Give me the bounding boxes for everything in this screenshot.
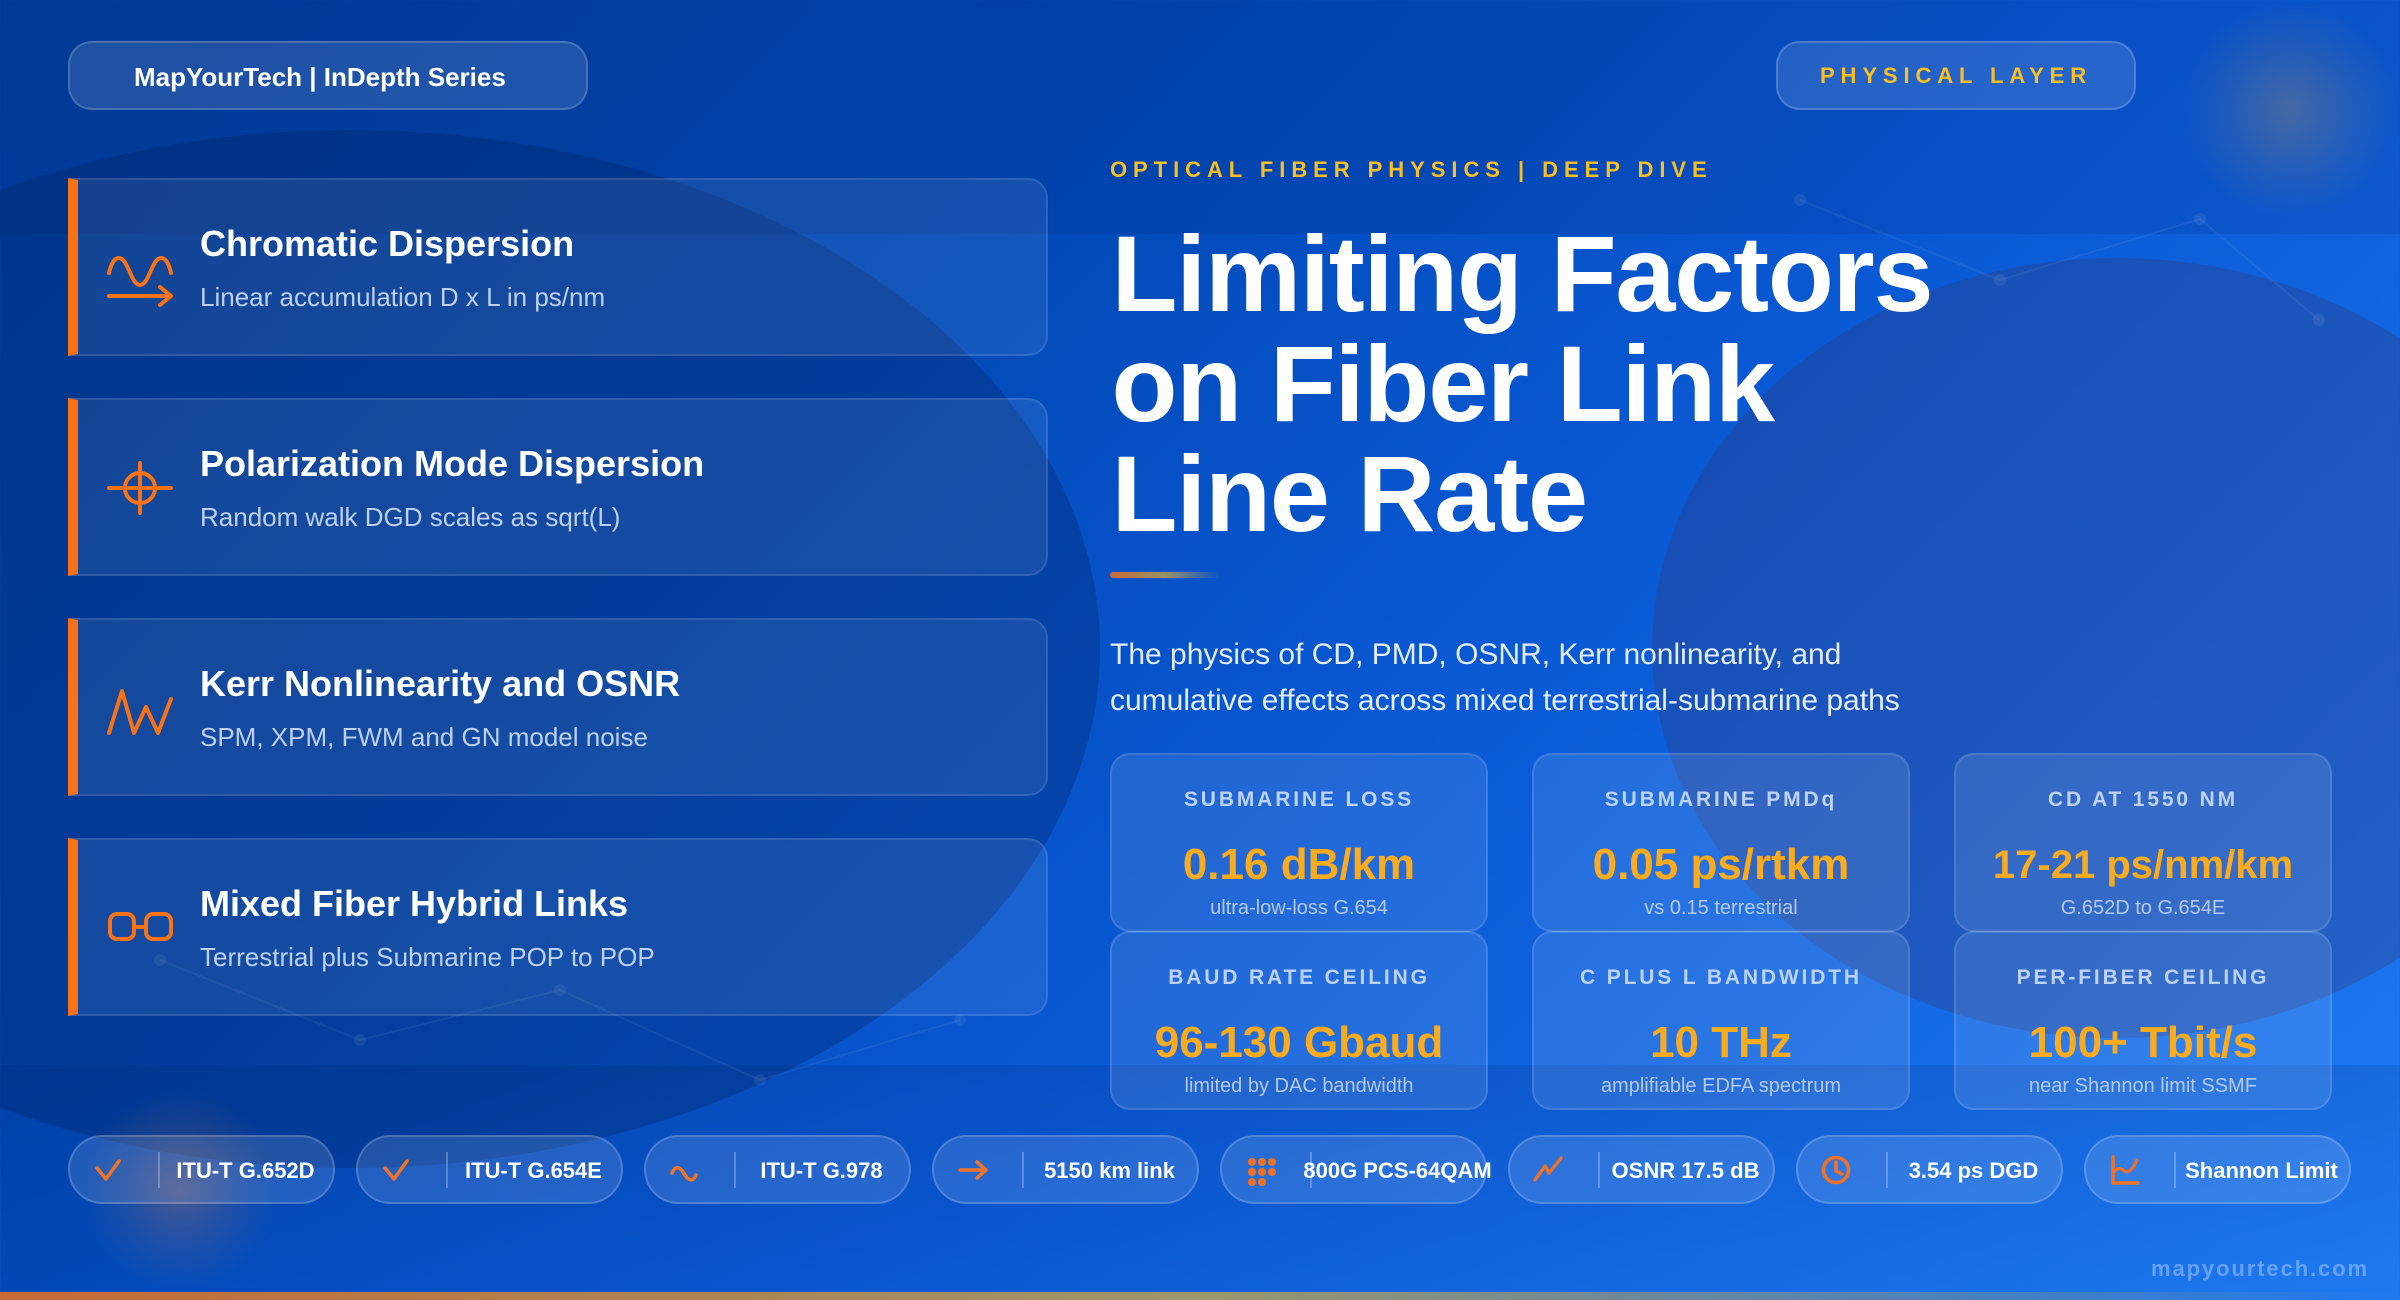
title: on Fiber Link [1112,323,1774,444]
tag: 3.54 ps DGD: 3.54 ps DGD [1909,1158,2038,1183]
stat: baud rate ceiling [1110,931,1488,1110]
icon: wave [670,1166,698,1182]
heading: mixed fiber hybrid links: Mixed Fiber Hybrid Links [200,883,628,924]
badge: physical layer [1776,41,2136,110]
tag: 800G PCS-64QAM: 800G PCS-64QAM [1303,1158,1492,1183]
icon: signal spark [1533,1156,1563,1182]
stat: C plus L bandwidth: C PLUS L BANDWIDTH [1580,966,1862,989]
eyebrow: OPTICAL FIBER PHYSICS | DEEP DIVE [1110,157,1713,182]
stat: baud rate ceiling: BAUD RATE CEILING [1168,966,1430,989]
stat: C plus L bandwidth [1532,931,1910,1110]
panel: polarization mode dispersion [68,398,1048,576]
heading: kerr nonlinearity: Kerr Nonlinearity and OSNR [200,663,680,704]
icon: check [383,1159,409,1181]
tag: 800G PCS-64QAM [1220,1135,1487,1204]
icon: check [95,1159,121,1181]
title: Limiting Factors [1112,213,1932,334]
heading: chromatic dispersion: Chromatic Dispersion [200,223,574,264]
bottom gradient bar [0,1292,2400,1300]
stat: per-fiber ceiling: near Shannon limit SSMF [2029,1075,2257,1097]
tag: ITU-T G.652D [68,1135,335,1204]
icon: linked fibers [108,912,173,941]
tag: Shannon limit [2084,1135,2351,1204]
stat: submarine loss [1110,753,1488,932]
tag: 3.54 ps DGD [1796,1135,2063,1204]
tag: OSNR 17.5 dB: OSNR 17.5 dB [1612,1158,1759,1183]
stat: submarine loss: 0.16 dB/km [1183,840,1415,889]
tag: Shannon limit: Shannon Limit [2185,1158,2338,1183]
stat: per-fiber ceiling: PER-FIBER CEILING [2017,966,2269,989]
description: cumulative effects across mixed terrestrial-submarine paths [1110,684,1900,717]
stat: CD at 1550 nm: G.652D to G.654E [2061,897,2225,919]
tag: OSNR 17.5 dB [1508,1135,1775,1204]
stat: CD at 1550 nm [1954,753,2332,932]
tag: ITU-T G.654E: ITU-T G.654E [465,1158,602,1183]
stat: CD at 1550 nm: CD AT 1550 NM [2048,788,2238,811]
badge: brand series: MapYourTech | InDepth Series [134,62,506,92]
icon: chart curve [2111,1155,2140,1185]
panel: chromatic dispersion [68,178,1048,356]
stat: submarine PMDq [1532,753,1910,932]
title [1112,213,1932,554]
icon: arrow [958,1160,988,1180]
title: Line Rate [1112,433,1587,554]
stat: C plus L bandwidth: amplifiable EDFA spectrum [1601,1075,1841,1097]
text: polarization mode dispersion detail: Random walk DGD scales as sqrt(L) [200,502,620,532]
description [1110,638,1900,717]
stat: baud rate ceiling: 96-130 Gbaud [1155,1018,1443,1067]
text: chromatic dispersion detail: Linear accumulation D x L in ps/nm [200,282,605,312]
text: mixed fiber detail: Terrestrial plus Submarine POP to POP [200,942,655,972]
panel: mixed fiber hybrid links [68,838,1048,1016]
stat: C plus L bandwidth: 10 THz [1650,1018,1792,1067]
tag: 5150 km link: 5150 km link [1044,1158,1175,1183]
stat: submarine PMDq: vs 0.15 terrestrial [1644,897,1798,919]
tag: ITU-T G.978: ITU-T G.978 [760,1158,883,1183]
stat: submarine PMDq: SUBMARINE PMDq [1605,788,1837,811]
icon: constellation dots [1248,1158,1276,1186]
tag: ITU-T G.652D: ITU-T G.652D [176,1158,315,1183]
stat: CD at 1550 nm: 17-21 ps/nm/km [1993,843,2293,887]
tag: ITU-T G.978 [644,1135,911,1204]
tag: 5150 km link [932,1135,1199,1204]
accent rule [1110,572,1220,578]
stat: submarine PMDq: 0.05 ps/rtkm [1593,840,1849,889]
icon: clock [1822,1156,1850,1184]
panel: kerr nonlinearity [68,618,1048,796]
heading: polarization mode dispersion: Polarization Mode Dispersion [200,443,704,484]
badge: physical layer: PHYSICAL LAYER [1820,63,2092,88]
website mark: mapyourtech.com [2151,1256,2369,1281]
description: The physics of CD, PMD, OSNR, Kerr nonlinearity, and [1110,638,1841,671]
stat: submarine loss: ultra-low-loss G.654 [1210,897,1388,919]
stat: per-fiber ceiling: 100+ Tbit/s [2029,1018,2257,1067]
icon: wave and arrow [106,256,174,308]
stat: baud rate ceiling: limited by DAC bandwidth [1184,1075,1414,1097]
icon: crosshair [107,461,173,515]
tag: ITU-T G.654E [356,1135,623,1204]
stat: submarine loss: SUBMARINE LOSS [1184,788,1414,811]
text: kerr nonlinearity detail: SPM, XPM, FWM and GN model noise [200,722,648,752]
badge: brand series [68,41,588,110]
stat: per-fiber ceiling [1954,931,2332,1110]
icon: nonlinear zigzag [106,689,174,736]
